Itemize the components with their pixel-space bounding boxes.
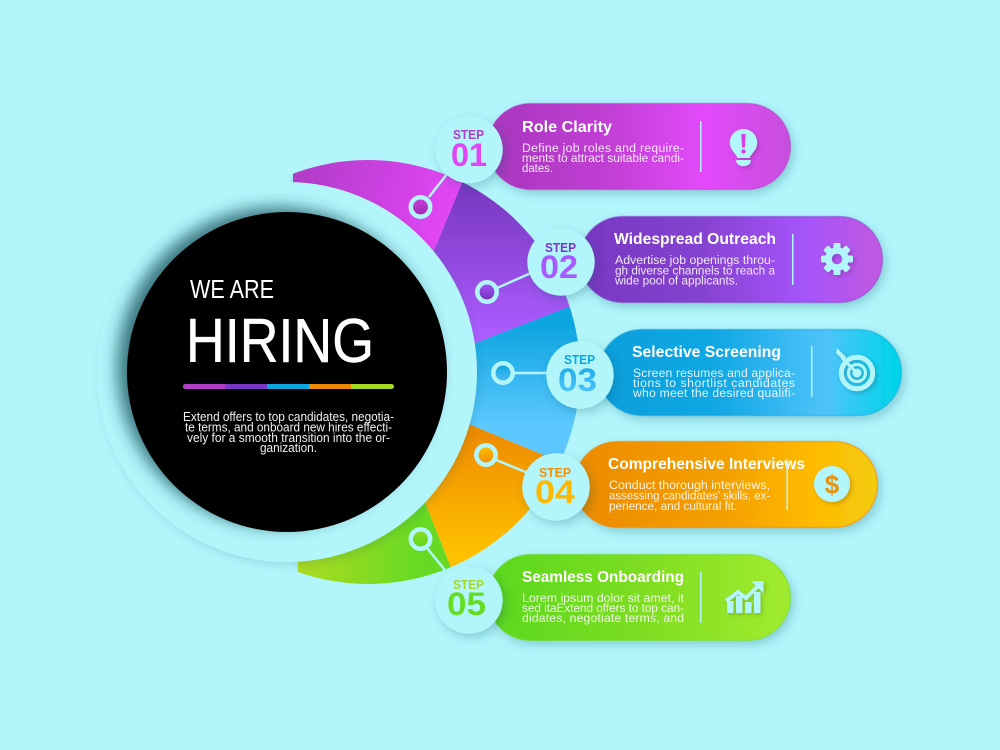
step 3 badge: 03 — [558, 362, 597, 398]
wheel segment 3 — [470, 306, 578, 456]
step 5 badge: STEP — [453, 578, 484, 592]
description — [632, 366, 795, 400]
connector and node 5 — [411, 529, 449, 575]
description: sed itaExtend offers to top can- — [522, 601, 684, 615]
connector and node 3 — [493, 363, 549, 383]
step 1 badge: STEP — [453, 128, 484, 142]
central black panel — [127, 212, 447, 532]
title: Comprehensive Interviews — [608, 456, 805, 473]
connector and node 2 — [477, 273, 531, 302]
description — [522, 591, 685, 625]
description: wide pool of applicants. — [614, 274, 738, 288]
heading: we are: WE ARE — [190, 274, 274, 304]
light ring — [97, 182, 477, 562]
panel: step 2 pill — [580, 216, 882, 302]
panel: step 3 pill — [598, 330, 902, 416]
description: perience, and cultural fit. — [609, 499, 737, 513]
description: ments to attract suitable candi- — [522, 151, 684, 165]
title: Selective Screening — [632, 344, 781, 361]
step 4 badge — [522, 453, 590, 521]
central description — [183, 410, 394, 455]
icon: dollar coin: $ — [825, 470, 840, 500]
infographic — [104, 102, 909, 649]
icon: target — [836, 348, 873, 389]
description: Conduct thorough interviews, — [609, 478, 770, 492]
description: Advertise job openings throu- — [615, 253, 775, 267]
colour bar — [183, 384, 394, 389]
step 3 badge — [546, 341, 614, 409]
black circle shadow — [117, 207, 437, 527]
wheel segment 4 — [425, 424, 544, 568]
wheel segment 5 — [297, 502, 451, 584]
description: gh diverse channels to reach a — [615, 264, 775, 278]
title: Seamless Onboarding — [522, 569, 684, 586]
connector and node 4 — [476, 445, 528, 473]
title: Widespread Outreach — [614, 231, 776, 248]
step 4 badge: STEP — [539, 466, 571, 480]
description: assessing candidates' skills, ex- — [609, 488, 770, 502]
step 4 badge: 04 — [535, 474, 575, 510]
icon: growth chart — [726, 581, 764, 613]
title: Role Clarity — [522, 119, 612, 136]
heading: hiring: HIRING — [186, 307, 374, 376]
description: didates, negotiate terms, and — [522, 611, 684, 625]
description: who meet the desired qualifi- — [632, 386, 795, 400]
step 2 badge: STEP — [545, 241, 576, 255]
description — [614, 253, 775, 288]
segmented arc wheel — [292, 160, 578, 584]
description: Define job roles and require- — [522, 141, 684, 155]
description — [522, 141, 684, 175]
step 5 badge — [435, 566, 503, 634]
icon: light bulb — [730, 129, 757, 166]
step 2 badge — [527, 228, 595, 296]
description — [609, 478, 770, 513]
step 3 badge: STEP — [564, 353, 595, 367]
connector and node 1 — [411, 174, 447, 217]
panel: step 5 pill — [488, 554, 790, 640]
central description: te terms, and onboard new hires effecti- — [185, 420, 392, 434]
step 1 badge: 01 — [451, 137, 487, 173]
description: Screen resumes and applica- — [633, 366, 795, 380]
wheel segment 2 — [434, 182, 570, 344]
description: Lorem ipsum dolor sit amet, it — [522, 591, 685, 605]
step 2 badge: 02 — [540, 249, 578, 285]
icon: dollar coin — [814, 466, 850, 502]
step 1 badge — [435, 116, 503, 183]
step 5 badge: 05 — [447, 586, 486, 622]
panel: step 4 pill — [574, 442, 878, 528]
panel: step 1 pill — [488, 104, 790, 190]
central description: Extend offers to top candidates, negotia- — [183, 410, 394, 424]
central description: ganization. — [260, 441, 317, 455]
central description: vely for a smooth transition into the or- — [187, 431, 390, 445]
description: dates. — [522, 161, 553, 175]
description: tions to shortlist candidates — [633, 376, 795, 390]
wheel segment 1 — [292, 160, 462, 252]
icon: gear — [821, 243, 853, 275]
